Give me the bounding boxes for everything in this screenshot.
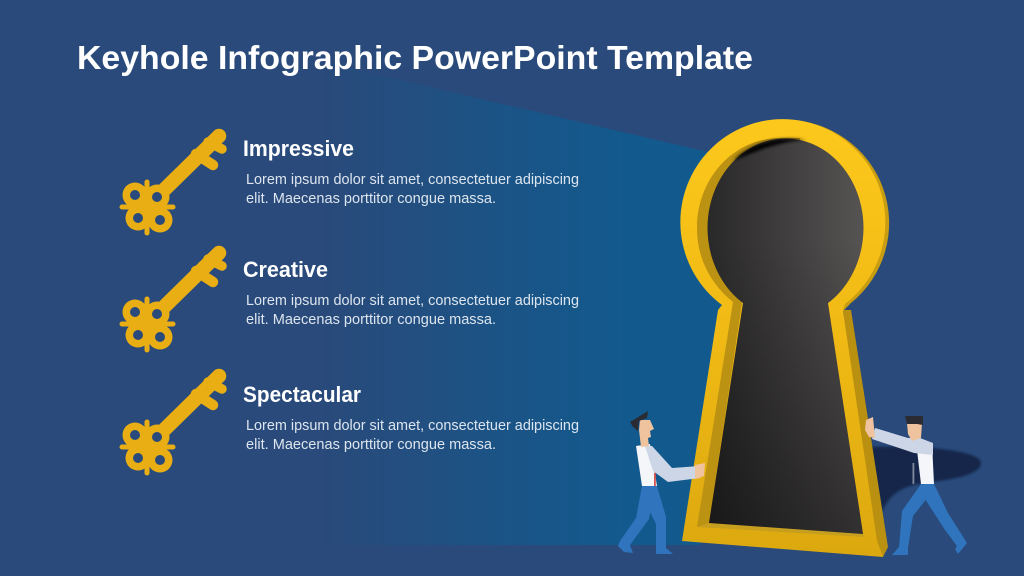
hair [630, 411, 648, 431]
figure: right man pushing [865, 416, 967, 555]
icon: key 2 [122, 253, 222, 350]
arms [645, 446, 700, 482]
hair [905, 416, 923, 425]
keyhole lower bevel [697, 523, 865, 537]
keyhole opening shading [708, 138, 864, 534]
shirt [917, 443, 934, 484]
icon: key 3 [122, 376, 222, 473]
keyhole top shadow [733, 139, 806, 161]
shirt [636, 444, 657, 486]
keyhole right side edge [843, 310, 888, 557]
icon: key 1 [122, 136, 222, 233]
arms [872, 428, 933, 455]
figure: left man pushing [618, 411, 705, 554]
face [907, 423, 922, 441]
keyhole rim edge [786, 120, 889, 311]
back leg [924, 484, 967, 554]
item: spectacular [122, 376, 579, 473]
text: impressive description: elit. Maecenas porttitor congue massa. [246, 191, 496, 207]
keyhole shadow [868, 447, 981, 512]
text: impressive description: Lorem ipsum dolor sit amet, consectetuer adipiscing [246, 172, 579, 188]
keyhole [680, 119, 889, 557]
text: spectacular description: Lorem ipsum dolor sit amet, consectetuer adipiscing [246, 418, 579, 434]
title: Keyhole Infographic PowerPoint Template [77, 39, 753, 76]
front leg [892, 484, 935, 555]
item: impressive [122, 136, 579, 233]
tie strip [912, 463, 914, 484]
heading: creative: Creative [243, 257, 328, 282]
back leg [618, 486, 657, 553]
text: spectacular description: elit. Maecenas porttitor congue massa. [246, 437, 496, 453]
light beam [320, 61, 745, 545]
keyhole inner bevel [697, 138, 800, 527]
item: creative [122, 253, 579, 350]
heading: spectacular: Spectacular [243, 382, 361, 407]
text: creative description: elit. Maecenas porttitor congue massa. [246, 312, 496, 328]
neck and face [639, 420, 654, 447]
keyhole golden frame [680, 119, 885, 557]
front leg [645, 486, 673, 554]
tie [654, 473, 656, 486]
heading: impressive: Impressive [243, 136, 354, 161]
hands [865, 417, 875, 438]
keyhole dark opening [708, 138, 864, 534]
text: creative description: Lorem ipsum dolor sit amet, consectetuer adipiscing [246, 293, 579, 309]
hand [695, 463, 705, 479]
